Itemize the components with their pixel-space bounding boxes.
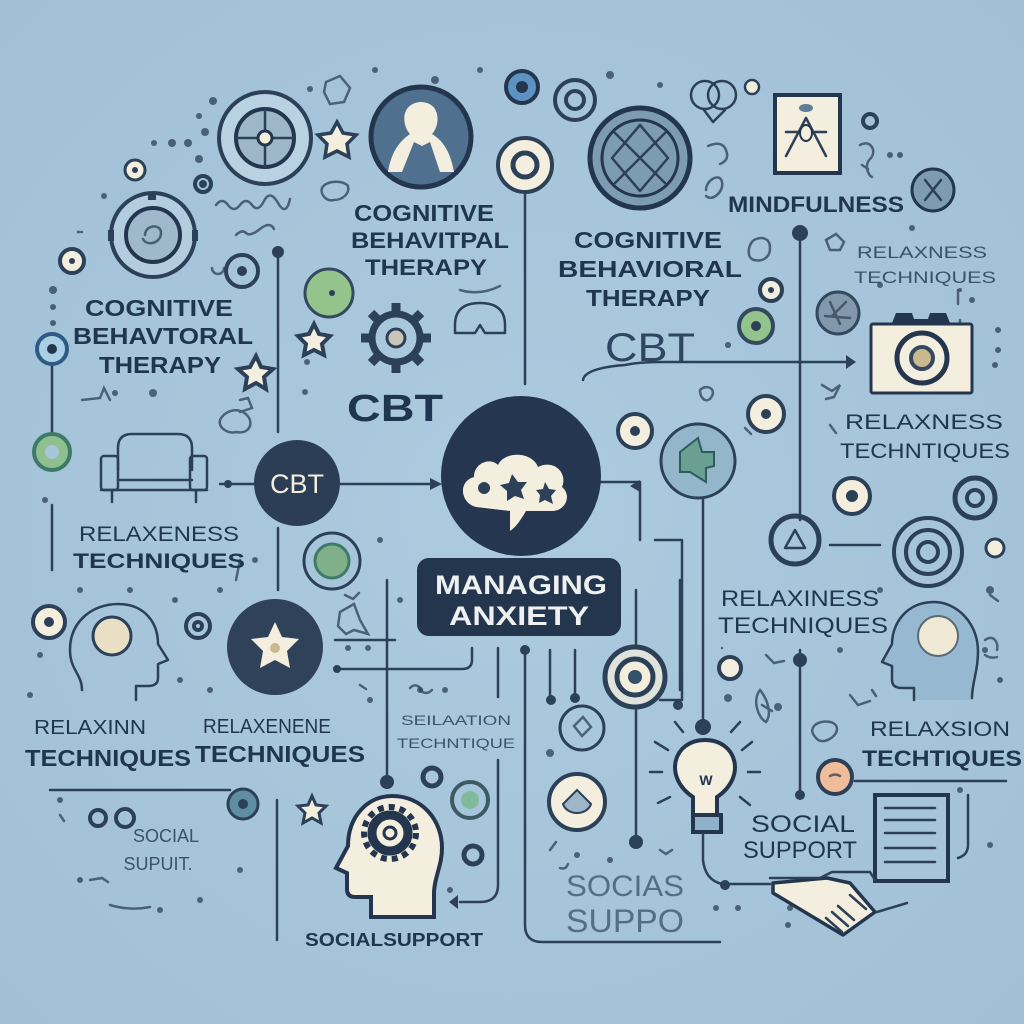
text: social support left — [123, 826, 199, 874]
text: social support right: SOCIAL — [751, 811, 855, 838]
icon: lightbulb: W — [699, 772, 713, 788]
text: relaxness techniques centre right — [718, 586, 888, 638]
icon: green blob — [305, 269, 353, 317]
central cloud brain icon — [441, 396, 601, 556]
text: relaxness techniques right — [840, 411, 1010, 463]
node: CBT: CBT — [270, 469, 324, 499]
text: relaxness techniques top right: TECHNIQUES — [854, 268, 996, 287]
text: relaxness techniques left — [73, 523, 245, 573]
text: relaxenene techniques: TECHNIQUES — [195, 741, 365, 767]
icon: head with brain right — [882, 602, 978, 700]
text: relaxenene techniques — [195, 716, 365, 767]
text: social support right — [743, 811, 857, 864]
icon: small ring upper — [195, 176, 211, 192]
icon: dark ring small — [423, 768, 441, 786]
text: relaxinn techniques: RELAXINN — [34, 717, 146, 739]
icon: small ring — [760, 279, 782, 301]
icon: head with heart brain — [70, 604, 168, 700]
text: social support sketch: SUPPO — [566, 903, 684, 939]
icon: brain-like knot — [817, 292, 859, 334]
icon: star mid — [298, 324, 330, 355]
text: seilation technique: TECHNTIQUE — [397, 735, 515, 751]
icon: ring center right — [748, 396, 784, 432]
icon: small ring top right — [863, 114, 877, 128]
label: CBT middle: CBT — [347, 388, 443, 430]
icon: cream node ring — [498, 138, 552, 192]
icon: right top ring — [912, 169, 954, 211]
icon: concentric right — [894, 518, 962, 586]
icon: small ring left — [60, 249, 84, 273]
heading: cognitive behavioral therapy, left: THERAPY — [99, 352, 221, 378]
text: social support sketch — [566, 870, 684, 939]
text: social support left: SOCIAL — [133, 826, 199, 846]
icon: small ring upper left — [125, 160, 145, 180]
icon: ring right b — [955, 478, 995, 518]
text: relaxness techniques top right: RELAXNESS — [857, 243, 987, 262]
icon: framed figure card — [775, 95, 840, 173]
icon: ring left — [33, 606, 65, 638]
title box: managing anxiety — [417, 558, 621, 636]
heading: cognitive behavioral therapy, top centre: THERAPY — [365, 255, 487, 280]
icon: green left ring — [34, 434, 70, 470]
icon: camera — [871, 313, 972, 393]
icon: teal document badge — [661, 424, 735, 498]
icon: lightbulb — [650, 722, 760, 832]
text: social support right: SUPPORT — [743, 837, 857, 864]
icon: mask knot — [691, 80, 759, 122]
icon: star top — [318, 122, 356, 157]
heading: cognitive behavioral therapy, top right — [558, 227, 742, 311]
heading: cognitive behavioral therapy, left: BEHAVTORAL — [73, 323, 253, 349]
icon: ring right a — [834, 478, 870, 514]
icon: star left — [238, 356, 273, 389]
heading: cognitive behavioral therapy, top centre — [351, 200, 509, 280]
text: relaxenene techniques: RELAXENENE — [203, 716, 331, 738]
icon: target wheel left — [108, 192, 198, 277]
icon: geometric badge — [590, 108, 690, 208]
text: relaxsion techtiques — [862, 718, 1022, 771]
icon: green ring bottom — [452, 782, 488, 818]
text: relaxness techniques top right — [854, 243, 996, 287]
icon: couch — [101, 434, 207, 502]
text: social support sketch: SOCIAS — [566, 870, 684, 903]
label: CBT upper: CBT — [605, 326, 695, 370]
heading: cognitive behavioral therapy, left: COGNITIVE — [85, 295, 233, 321]
heading: cognitive behavioral therapy, top centre: BEHAVITPAL — [351, 228, 509, 253]
icon: ring — [186, 614, 210, 638]
icon: node end — [792, 225, 808, 241]
icon: green large ring — [304, 533, 360, 589]
text: relaxness techniques centre right: TECHNIQUES — [718, 613, 888, 638]
icon: compass wheel — [219, 92, 311, 184]
connector lines — [50, 190, 1006, 942]
icon: small star bottom — [298, 796, 326, 823]
text: relaxsion techtiques: RELAXSION — [870, 718, 1010, 741]
node: CBT — [254, 440, 340, 526]
text: relaxness techniques left: TECHNIQUES — [73, 550, 245, 573]
icon: ring small — [719, 657, 741, 679]
icon: small rings left bottom — [90, 809, 134, 827]
icon: small ring right of bottom — [721, 647, 723, 649]
scattered sketch marks — [60, 76, 998, 909]
text: seilation technique: SEILAATION — [401, 712, 511, 728]
icon: blue left ring — [37, 334, 67, 364]
heading: cognitive behavioral therapy, top right: THERAPY — [586, 285, 710, 311]
icon: ring center — [618, 414, 652, 448]
text: seilation technique — [397, 712, 515, 751]
icon: handshake — [770, 872, 907, 935]
icon: teal ring bottom left — [228, 789, 258, 819]
icon: ring bottom centre — [560, 706, 604, 750]
text: relaxness techniques right: TECHNTIQUES — [840, 440, 1010, 463]
icon: gear — [361, 303, 431, 373]
heading: cognitive behavioral therapy, top centre: COGNITIVE — [354, 200, 494, 226]
icon: flower badge — [227, 599, 323, 695]
icon: target concentric — [605, 647, 665, 707]
icon: peach ring — [818, 760, 852, 794]
text: relaxness techniques right: RELAXNESS — [845, 411, 1003, 434]
icon: green ring right — [739, 309, 773, 343]
text: relaxinn techniques: TECHNIQUES — [25, 745, 191, 771]
text: relaxness techniques left: RELAXENESS — [79, 523, 239, 546]
icon: small dark ring — [464, 846, 482, 864]
heading: cognitive behavioral therapy, top right: COGNITIVE — [574, 227, 722, 253]
icon: person badge — [371, 87, 471, 187]
icon: blue top ring — [506, 71, 538, 103]
icon: document — [875, 795, 948, 881]
text: social support bottom: SOCIALSUPPORT — [305, 930, 483, 950]
text: social support left: SUPUIT. — [123, 854, 193, 874]
icon: ring right c — [986, 539, 1004, 557]
icon: ring near center left — [226, 255, 258, 287]
title box: managing anxiety: MANAGING — [435, 570, 607, 600]
icon: center arrow — [630, 480, 640, 492]
title box: managing anxiety: ANXIETY — [449, 601, 589, 631]
icon: ring with blob — [549, 774, 605, 830]
heading: mindfulness: MINDFULNESS — [728, 192, 904, 217]
icon: top ring — [555, 80, 595, 120]
text: relaxness techniques centre right: RELAXINESS — [721, 586, 879, 611]
icon: arrow from CBT — [430, 478, 442, 490]
heading: cognitive behavioral therapy, top right: BEHAVIORAL — [558, 256, 742, 282]
heading: cognitive behavioral therapy, left — [73, 295, 253, 378]
connector end nodes — [224, 246, 856, 909]
icon: head with gear — [336, 796, 442, 917]
text: relaxsion techtiques: TECHTIQUES — [862, 746, 1022, 771]
text: relaxinn techniques — [25, 717, 191, 771]
icon: ring wheel right — [771, 516, 819, 564]
icon: goggles — [455, 303, 505, 333]
